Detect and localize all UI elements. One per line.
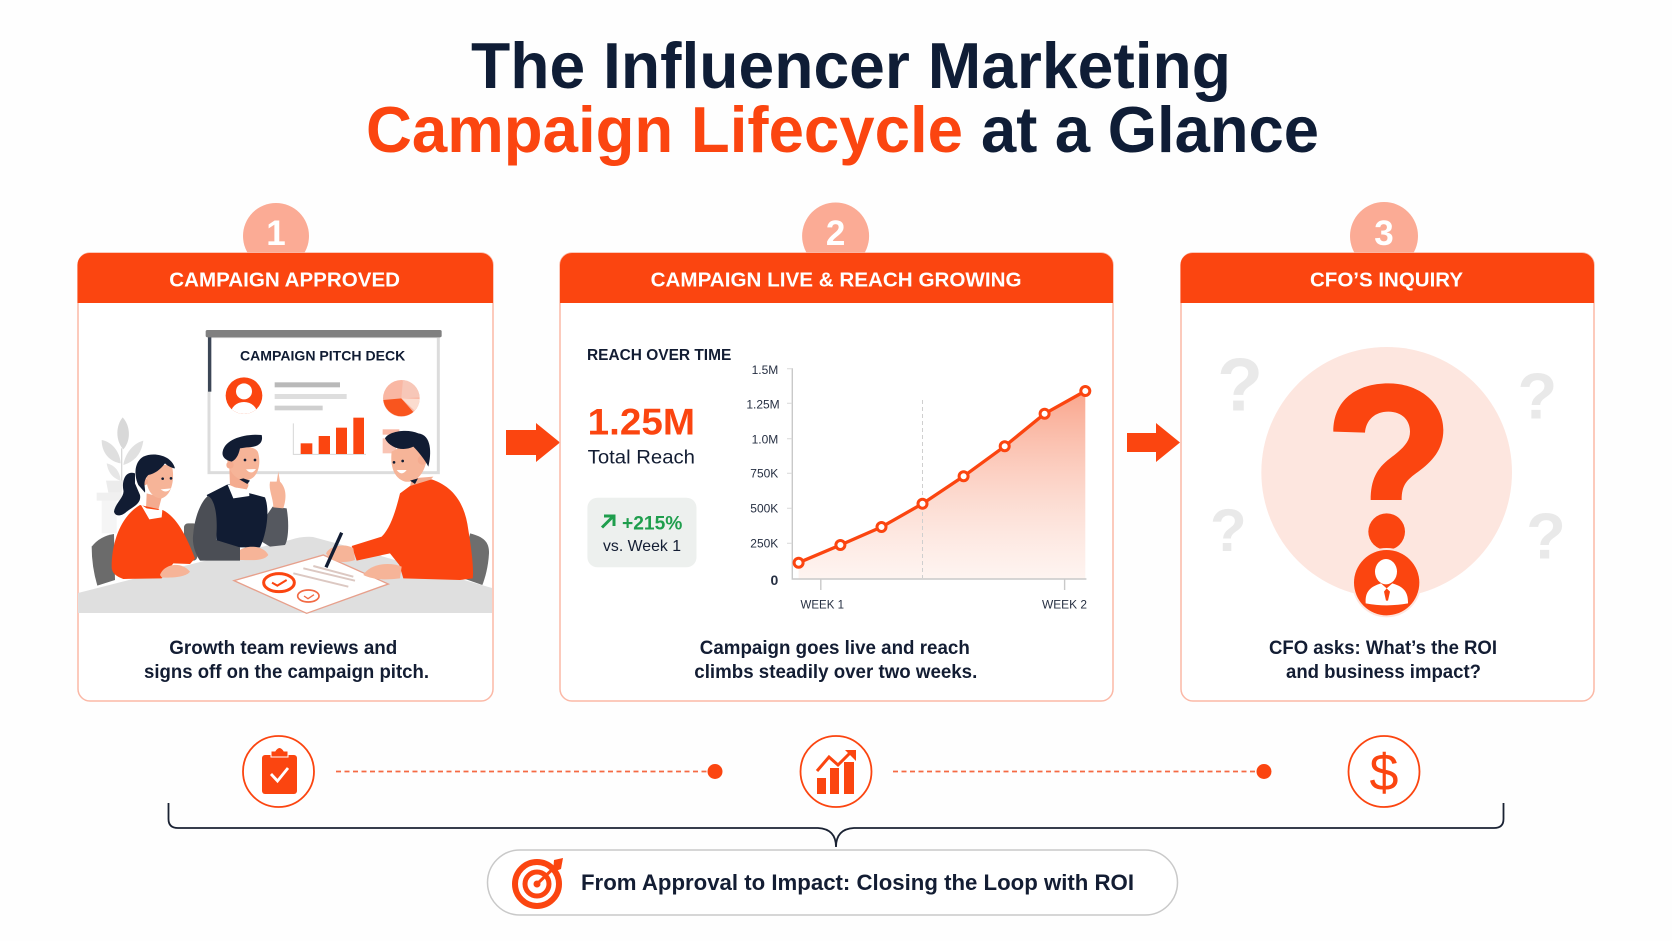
icon: growth chart — [800, 736, 872, 807]
presentation screen: CAMPAIGN PITCH DECK — [240, 348, 405, 364]
step badge 1 — [243, 203, 309, 269]
metric: total reach — [588, 401, 695, 468]
person: woman — [112, 454, 195, 579]
header: campaign live — [560, 253, 1113, 303]
line chart: reach over time: 1.0M — [752, 432, 778, 446]
title — [366, 29, 1319, 166]
line chart: reach over time: 500K — [750, 501, 778, 515]
title: at a Glance — [981, 93, 1319, 166]
header: campaign live: CAMPAIGN LIVE & REACH GROWING — [651, 269, 1022, 292]
growth badge: vs. Week 1 — [603, 538, 681, 555]
chart title: REACH OVER TIME — [587, 347, 731, 364]
icon: target — [515, 858, 563, 906]
panel: campaign approved — [78, 253, 493, 701]
timeline connector — [893, 764, 1272, 779]
timeline connector — [336, 764, 722, 779]
description: climbs steadily over two weeks. — [694, 661, 977, 683]
icon: clipboard check — [243, 736, 314, 807]
panel: campaign live — [560, 253, 1113, 701]
step badge 2 — [802, 202, 869, 270]
illustration: CFO question — [1210, 343, 1566, 617]
person: man signing — [326, 431, 489, 585]
description — [1269, 637, 1497, 683]
document with check marks — [234, 555, 388, 613]
large question mark — [1333, 383, 1443, 550]
arrow — [506, 423, 560, 462]
summary pill: From Approval to Impact: Closing the Loop with ROI — [581, 870, 1134, 895]
growth badge: +215% — [622, 512, 682, 534]
growth badge — [587, 498, 696, 567]
description: CFO asks: What’s the ROI — [1269, 637, 1497, 659]
faded question marks: ? — [1210, 497, 1247, 564]
icon: CFO avatar — [1352, 548, 1421, 617]
step badge 2: 2 — [826, 214, 845, 253]
bracket — [168, 803, 1504, 847]
description: and business impact? — [1286, 661, 1481, 683]
line chart: reach over time: 1.5M — [752, 363, 778, 377]
plant and chairs, left side — [92, 417, 197, 586]
faded question marks — [1210, 343, 1566, 573]
step badge 1: 1 — [266, 214, 286, 253]
icon: dollar: $ — [1370, 744, 1399, 802]
description — [694, 637, 977, 683]
line chart: reach over time: 0 — [771, 572, 779, 588]
header: campaign approved: CAMPAIGN APPROVED — [169, 269, 400, 292]
title: The Influencer Marketing — [471, 29, 1231, 102]
person: man in dark sweater — [193, 435, 288, 561]
description: Campaign goes live and reach — [700, 637, 970, 659]
line chart: reach over time: 1.25M — [746, 398, 780, 412]
faded question marks: ? — [1217, 343, 1263, 427]
description: signs off on the campaign pitch. — [144, 661, 429, 683]
icon: dollar — [1348, 736, 1420, 807]
faded question marks: ? — [1517, 360, 1557, 433]
line chart: reach over time: WEEK 1 — [800, 597, 844, 611]
description: Growth team reviews and — [169, 637, 397, 659]
step badge 3 — [1350, 202, 1418, 270]
illustration: team reviewing pitch deck — [78, 330, 492, 613]
header: CFO's inquiry — [1180, 253, 1594, 303]
line chart: reach over time: 750K — [750, 467, 778, 481]
description — [144, 637, 429, 683]
header: campaign approved — [78, 253, 493, 303]
line chart: reach over time — [746, 363, 1090, 611]
arrow — [1127, 423, 1180, 462]
presentation screen — [206, 330, 442, 473]
metric: total reach: Total Reach — [588, 446, 695, 468]
title: Campaign Lifecycle — [366, 93, 963, 166]
header: CFO's inquiry: CFO’S INQUIRY — [1310, 269, 1463, 292]
line chart: reach over time: WEEK 2 — [1042, 597, 1087, 611]
line chart: reach over time: 250K — [750, 536, 778, 550]
panel: CFO's inquiry — [1180, 253, 1594, 701]
metric: total reach: 1.25M — [588, 401, 695, 442]
step badge 3: 3 — [1374, 214, 1394, 253]
summary pill — [488, 850, 1178, 915]
table — [78, 537, 492, 613]
faded question marks: ? — [1526, 500, 1566, 573]
